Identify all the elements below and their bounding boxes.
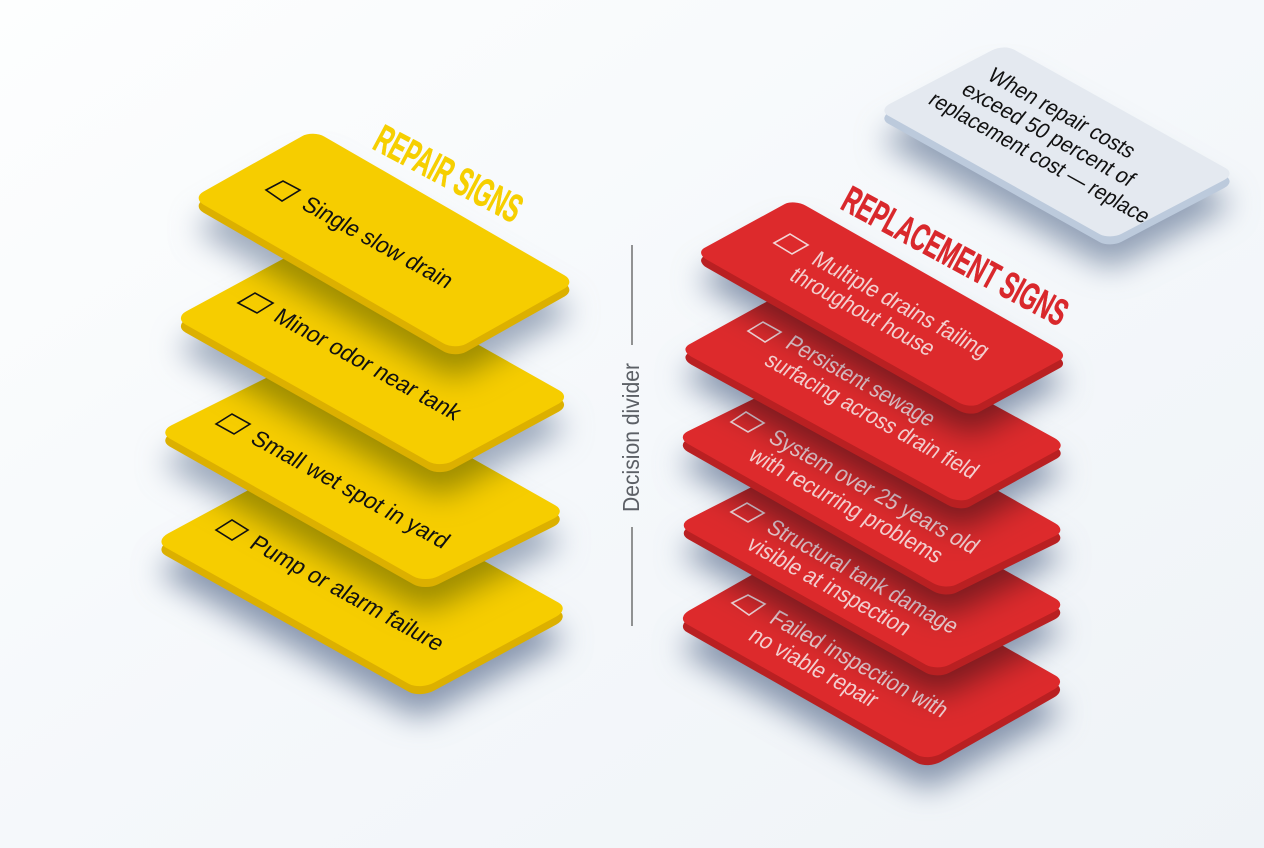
card: minor odor near tank: Minor odor near tank: [269, 303, 468, 425]
card: multiple drains failing: Multiple drains failing: [807, 246, 996, 363]
card: pump or alarm failure: Pump or alarm failure: [245, 530, 450, 656]
card: minor odor near tank: [174, 247, 571, 498]
card: pump or alarm failure: [154, 460, 570, 720]
card: system over 25 years: with recurring problems: [743, 442, 949, 568]
card: failed inspection: [676, 539, 1067, 791]
card: persistent sewage: surfacing across drain field: [760, 347, 985, 483]
card: system over 25 years: System over 25 years old: [764, 424, 985, 559]
note text: replacement cost — replace: [924, 87, 1156, 228]
note text: When repair costs: [983, 63, 1141, 163]
card: persistent sewage: Persistent sewage: [781, 330, 942, 431]
card: persistent sewage: [679, 291, 1067, 531]
card: single slow drain: Single slow drain: [297, 191, 460, 293]
card: small wet spot in yard: Small wet spot in yard: [246, 425, 456, 553]
card: failed inspection: Failed inspection with: [765, 605, 955, 722]
card: structural tank damage: [677, 459, 1067, 698]
card: multiple drains failing: [695, 199, 1069, 436]
card: single slow drain: [192, 130, 576, 380]
card: structural tank damage: Structural tank damage: [762, 514, 965, 638]
heading: repair signs: REPAIR SIGNS: [367, 117, 530, 232]
card: structural tank damage: visible at inspection: [742, 531, 918, 640]
card: system over 25 years: [676, 377, 1067, 617]
heading: replacement signs: REPLACEMENT SIGNS: [835, 179, 1075, 335]
panel: replacement signs stack: [676, 199, 1069, 791]
card: small wet spot in yard: [158, 361, 567, 613]
card: multiple drains failing: throughout house: [785, 262, 941, 361]
panel: repair signs stack: [154, 130, 576, 720]
label: decision divider: Decision divider: [618, 363, 644, 512]
panel: cost rule note card: [878, 44, 1236, 270]
note text: exceed 50 percent of: [957, 77, 1142, 192]
card: failed inspection: no viable repair: [744, 622, 885, 712]
